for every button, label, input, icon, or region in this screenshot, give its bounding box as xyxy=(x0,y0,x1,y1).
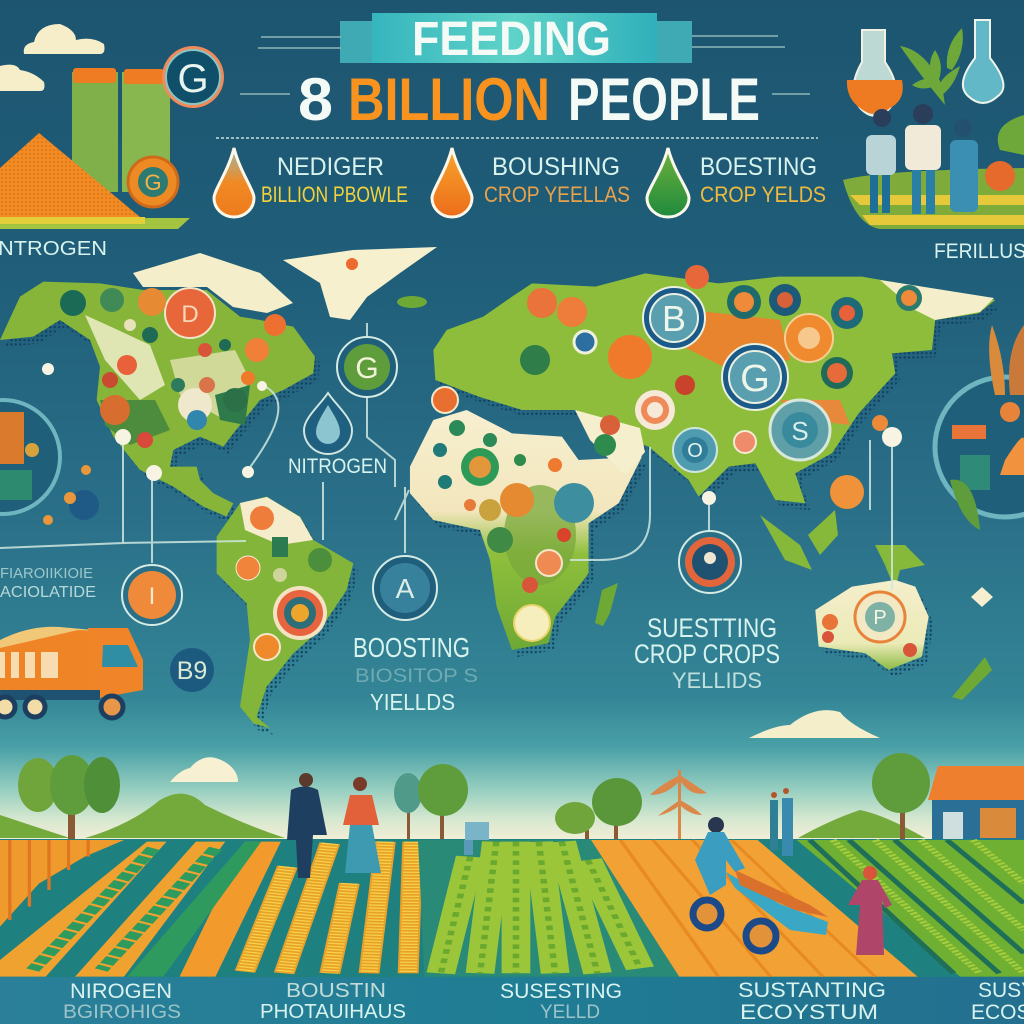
medallion orange xyxy=(785,314,833,362)
title line: FEEDING: FEEDING xyxy=(412,13,611,66)
worker bending xyxy=(464,822,489,855)
caption 1: BGIROHIGS xyxy=(63,1002,181,1023)
medallion: A xyxy=(373,556,437,620)
map pins xyxy=(42,363,902,505)
label: SUSTAINING CROP YIELDS: CROP CROPS xyxy=(634,639,780,669)
person 3 xyxy=(950,119,978,212)
badge: B9: B9 xyxy=(177,657,207,685)
orange marker in islands xyxy=(830,475,864,509)
badge G: G xyxy=(177,57,209,101)
hills xyxy=(0,794,925,838)
continent: Africa xyxy=(410,387,642,650)
title banner xyxy=(340,13,692,66)
bottom caption band xyxy=(0,977,1024,1024)
drop 3 with text: BOESTING xyxy=(700,153,817,181)
trees xyxy=(18,753,930,842)
southeast Asia islands xyxy=(760,510,925,590)
icon: plant right xyxy=(989,325,1024,395)
farmer man xyxy=(287,773,327,878)
caption 2: PHOTAUIHAUS xyxy=(260,1001,406,1023)
caption 2 xyxy=(260,980,406,1023)
label: SUSTAINING CROP YIELDS xyxy=(634,613,780,693)
medallion: orange: I xyxy=(149,583,155,610)
icon: water drop xyxy=(304,393,352,454)
medallion O xyxy=(673,428,717,472)
palm xyxy=(650,770,707,840)
drop 3 with text xyxy=(647,148,826,217)
halftone coast shadows xyxy=(5,280,1000,735)
drop 3 with text: CROP YELDS xyxy=(700,182,826,207)
continent: Australia: P xyxy=(873,607,887,629)
farmer woman xyxy=(343,777,381,873)
field 1: wheat and orange rows xyxy=(0,840,281,977)
field 3: leafy rows xyxy=(418,840,679,977)
title line: 8 BILLION PEOPLE: 8 xyxy=(298,66,333,133)
medallion G xyxy=(722,344,788,410)
caption 2: BOUSTIN xyxy=(286,980,386,1002)
icon: cloud xyxy=(24,24,104,54)
medallion S xyxy=(770,400,830,460)
farmers talking xyxy=(287,773,381,878)
medallion: orange xyxy=(122,565,182,625)
title line: 8 BILLION PEOPLE: BILLION xyxy=(348,66,550,133)
farmhouse xyxy=(928,766,1024,840)
farmer with wheelbarrow xyxy=(693,817,828,951)
panel: right produce plate xyxy=(935,377,1024,530)
badge orange xyxy=(128,157,178,207)
continent: Greenland xyxy=(283,247,437,320)
label: SUSTAINING CROP YIELDS: YELLIDS xyxy=(672,668,762,693)
field 2: corn rows xyxy=(245,842,413,973)
medallion G: G xyxy=(740,358,770,400)
caption 4 xyxy=(738,979,886,1024)
label: BOOSTING CROP YIELDS: YIELLDS xyxy=(370,689,455,715)
medallion O: O xyxy=(687,440,703,462)
world map xyxy=(0,247,1000,735)
caption 4: ECOYSTUM xyxy=(740,1001,878,1024)
medallion B: B xyxy=(662,298,686,339)
caption 1 xyxy=(63,980,181,1023)
drop 1 with text: NEDIGER xyxy=(277,153,384,181)
icon: water flask xyxy=(963,20,1003,103)
continent: South America xyxy=(217,497,353,728)
dotted divider xyxy=(216,137,818,139)
medallion: green G: G xyxy=(355,352,379,385)
small globe icon xyxy=(43,465,99,525)
leaf sprig xyxy=(950,480,980,530)
connector lines xyxy=(0,323,892,590)
medallion: green G xyxy=(337,337,397,397)
badge orange: G xyxy=(144,170,162,195)
title line: 8 BILLION PEOPLE: PEOPLE xyxy=(568,66,760,133)
label: NITROGEN: NTROGEN xyxy=(0,238,107,260)
icon: truck xyxy=(0,627,143,718)
distant pair xyxy=(770,788,793,856)
medallion: person xyxy=(679,531,741,593)
island: Madagascar xyxy=(595,583,618,626)
wheels xyxy=(693,900,776,951)
left caption: ACIOLATIDE xyxy=(0,584,96,601)
drop 1 with text: BILLION PBOWLE xyxy=(261,182,408,207)
drop 2 with text: BOUSHING xyxy=(492,153,620,181)
caption 3: SUSESTING xyxy=(500,980,622,1003)
orange produce xyxy=(985,161,1015,191)
drop 2 with text: CROP YEELLAS xyxy=(484,182,630,207)
title line: 8 BILLION PEOPLE xyxy=(298,66,760,133)
icon: green leaves xyxy=(900,28,1024,155)
people xyxy=(866,104,978,214)
wheels xyxy=(0,696,123,718)
label: NITROGEN center: NITROGEN xyxy=(288,455,387,478)
continent: North America xyxy=(0,282,315,517)
decorative title lines xyxy=(240,36,810,94)
panel: left produce plate xyxy=(0,400,60,514)
small cream diamond xyxy=(971,587,993,607)
label: BOOSTING CROP YIELDS: BOOSTING xyxy=(353,632,470,663)
medallion S: S xyxy=(791,416,809,446)
field 5: green rows xyxy=(797,840,1024,977)
continent: Australia xyxy=(815,580,929,670)
medallion: A: A xyxy=(396,573,415,604)
woman in red xyxy=(848,866,892,955)
crop fields xyxy=(0,839,1024,977)
person 1 xyxy=(866,109,896,213)
person 2 xyxy=(905,104,941,214)
left caption xyxy=(0,565,96,601)
caption 3: YELLD xyxy=(540,1002,600,1023)
icon: green silos xyxy=(72,68,170,192)
left caption: FIAROIIKIOIE xyxy=(0,565,93,582)
medallion rings xyxy=(635,390,675,430)
island: New Zealand xyxy=(952,657,992,700)
icon: orange fertilizer pile xyxy=(0,133,140,217)
label: SUSTAINING CROP YIELDS: SUESTTING xyxy=(647,613,777,643)
badge G xyxy=(162,46,224,108)
panel: nitrogen factory top left xyxy=(0,24,224,229)
caption 3 xyxy=(500,980,622,1023)
badge: B9 xyxy=(170,648,214,692)
caption 1: NIROGEN xyxy=(70,980,172,1003)
continent: arctic islands xyxy=(133,253,293,313)
icon: orange flask xyxy=(847,30,903,116)
label: BOOSTING CROP YIELDS xyxy=(353,632,478,715)
label: BOOSTING CROP YIELDS: BIOSITOP S xyxy=(355,666,478,687)
caption 5 xyxy=(971,979,1024,1024)
continent: North America: D xyxy=(181,301,199,328)
panel: flasks and people top right xyxy=(843,20,1024,229)
clouds xyxy=(170,710,880,782)
continent: Eurasia xyxy=(433,265,995,503)
drop 2 with text xyxy=(432,148,630,217)
drop 1 with text xyxy=(214,148,408,217)
field 4: orange soil xyxy=(591,840,918,977)
caption 4: SUSTANTING xyxy=(738,979,886,1002)
medallion B xyxy=(643,287,705,349)
